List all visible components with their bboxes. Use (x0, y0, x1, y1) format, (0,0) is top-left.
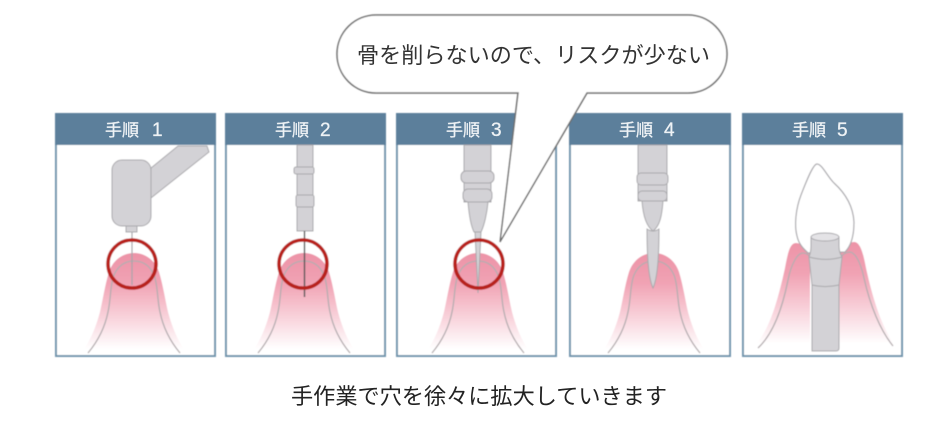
heading: step 5 label: 手順 5 (792, 120, 848, 141)
gum: step 4 (603, 253, 705, 354)
panel: step 4 (569, 113, 731, 356)
heading: step 3 label: 手順 3 (446, 120, 502, 141)
heading: step 2 label: 手順 2 (275, 120, 331, 141)
gum lines: step 5 (758, 252, 893, 348)
icon: implant (809, 233, 842, 351)
panel: step 2 (225, 113, 386, 356)
header: step 1 (55, 113, 216, 145)
header: step 5 (742, 113, 903, 145)
highlight circle: step 2 (279, 240, 327, 288)
icon: widest drill (637, 145, 668, 288)
icon: crown (796, 164, 854, 253)
header: step 3 (396, 113, 557, 145)
header: step 2 (225, 113, 386, 145)
gum: step 5 (757, 242, 895, 349)
heading: step 1 label: 手順 1 (105, 120, 163, 141)
panel: step 3 (396, 113, 557, 356)
highlight circle: step 1 (108, 240, 156, 288)
panel: step 5 (742, 113, 903, 356)
icon: drill with thin needle (294, 145, 314, 297)
gum: step 2 (253, 253, 355, 354)
gum: step 1 (83, 253, 185, 354)
heading: step 4 label: 手順 4 (619, 120, 675, 141)
icon: wider drill (461, 145, 494, 293)
panel: step 1 (55, 113, 216, 356)
highlight circle: step 3 (455, 240, 503, 288)
header: step 4 (569, 113, 731, 145)
caption: 手作業で穴を徐々に拡大していきます (291, 384, 667, 409)
speech bubble (337, 15, 727, 242)
icon: handpiece (112, 146, 209, 285)
gum: step 3 (427, 253, 529, 354)
bubble text: 骨を削らないので、リスクが少ない (357, 43, 710, 68)
